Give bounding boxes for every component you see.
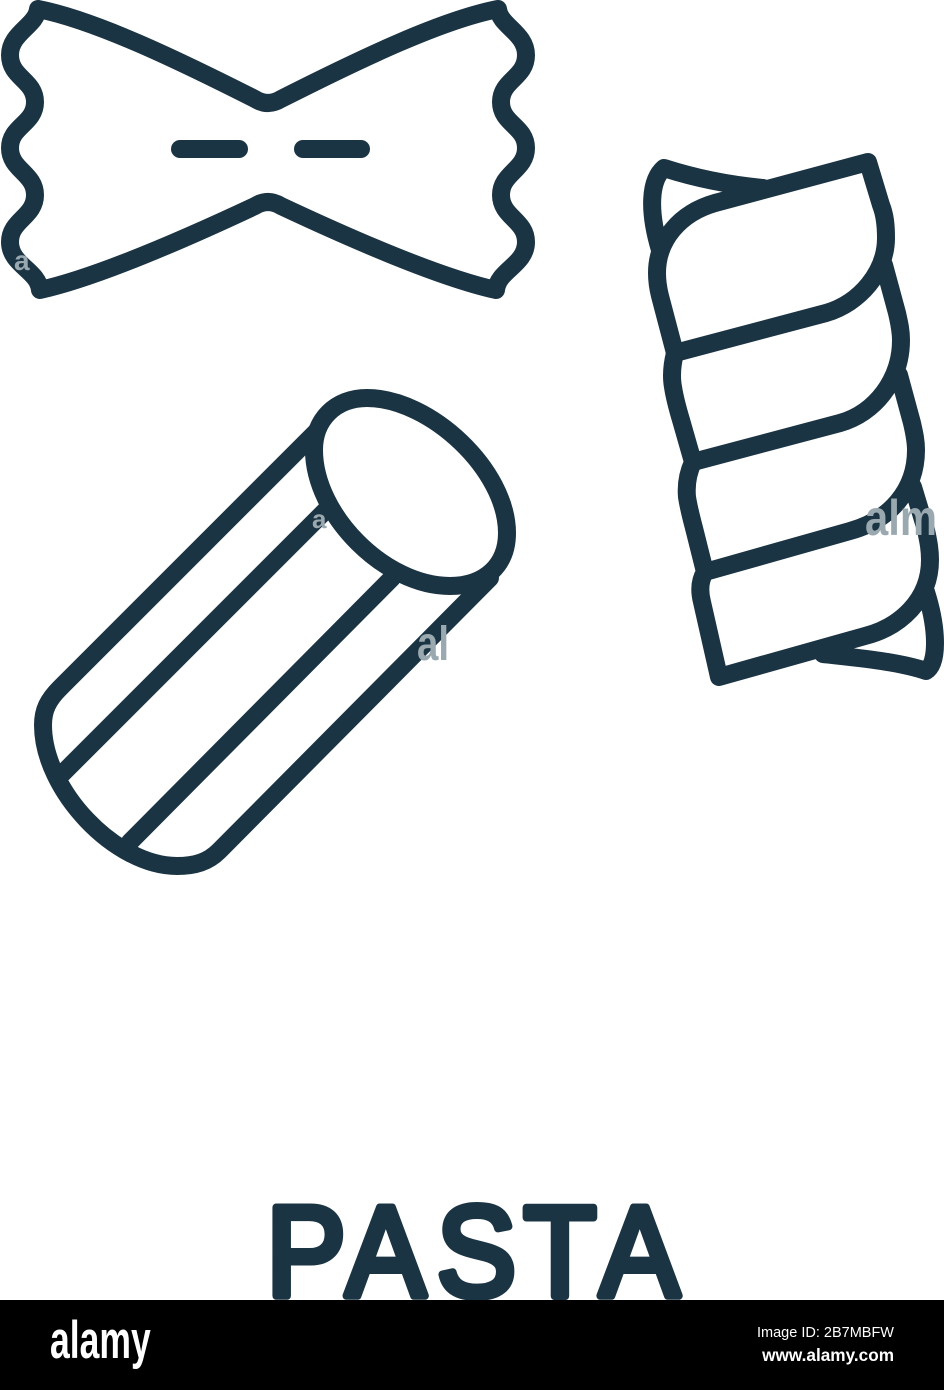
watermark fragments: al (417, 618, 449, 671)
watermark fragments: a (14, 245, 30, 276)
website url: www.alamy.com (762, 1345, 894, 1365)
image id: Image ID: 2B7MBFW (757, 1325, 894, 1341)
icon: farfalle bow tie (10, 9, 526, 290)
icon: rigatoni tube (43, 398, 507, 866)
footer bar (0, 1300, 944, 1390)
watermark fragments: a (312, 504, 327, 534)
logo: alamy (50, 1311, 151, 1370)
icon: fusilli spiral (652, 162, 935, 677)
watermark fragments (14, 245, 937, 671)
